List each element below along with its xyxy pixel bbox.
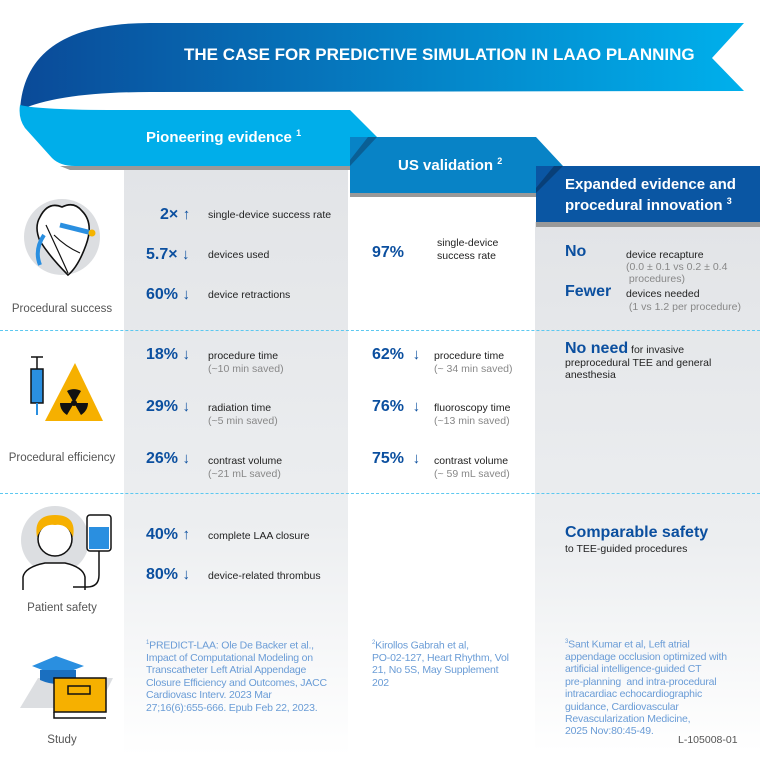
stat: 60%: 60% ↓ [146,286,190,303]
reference 1: Impact of Computational Modeling on [146,652,313,664]
icon: heart [24,199,100,276]
panel: us validation: single-device [437,237,498,249]
stat: 18%: 18% ↓ [146,346,190,363]
reference 3: 2025 Nov:80:45-49. [565,725,654,737]
panel: us validation: fluoroscopy time [434,402,510,414]
reference 3: Revascularization Medicine, [565,713,690,725]
dashed dividers [0,330,760,331]
panel: expanded evidence: (0.0 ± 0.1 vs 0.2 ± 0.4 [626,261,727,273]
reference 3: 3Sant Kumar et al, Left atrial [565,638,690,650]
panel: pioneering evidence [146,206,331,714]
stat: 40%: 40% ↑ [146,526,190,543]
reference 3: intracardiac echocardiographic [565,688,702,700]
stat: fewer devices: Fewer [565,283,611,300]
code: L-105008-01: L-105008-01 [678,734,738,746]
reference 1: 1PREDICT-LAA: Ole De Backer et al., [146,640,314,652]
label: procedural efficiency: Procedural efficiency [9,452,115,464]
panel: pioneering evidence: (~10 min saved) [208,363,284,375]
reference 2: PO-02-127, Heart Rhythm, Vol [372,652,509,664]
reference 3: guidance, Cardiovascular [565,701,679,713]
stat: 62%: 62% ↓ [372,346,420,363]
panel: expanded evidence: (1 vs 1.2 per procedure) [629,301,741,313]
panel: pioneering evidence: complete LAA closure [208,530,310,542]
reference 1: Closure Efficiency and Outcomes, JACC [146,677,327,689]
column background: expanded [535,222,760,752]
stat: comparable safety [565,524,708,555]
reference 3: pre-planning and intra-procedural [565,676,716,688]
us band [350,137,563,193]
heading: us validation: US validation 2 [398,156,502,174]
reference 3 [565,638,727,737]
dark title band [20,23,744,110]
panel: pioneering evidence: (~5 min saved) [208,415,278,427]
reference 1: 27;16(6):655-666. Epub Feb 22, 2023. [146,702,317,714]
heading: expanded evidence [565,176,736,214]
reference 1: Transcatheter Left Atrial Appendage [146,664,306,676]
icon: study [20,656,113,719]
stat: no need [565,340,711,381]
panel: us validation: contrast volume [434,455,508,467]
title: THE CASE FOR PREDICTIVE SIMULATION IN LAAO PLANNING [184,45,695,64]
pioneering band [20,105,377,166]
ribbon header [20,23,760,227]
label: study: Study [47,734,77,746]
stat: 76%: 76% ↓ [372,398,420,415]
label: procedural success: Procedural success [12,303,112,315]
stat: 26%: 26% ↓ [146,450,190,467]
panel: us validation: (~ 59 mL saved) [434,468,510,480]
expanded band [536,166,760,222]
panel: pioneering evidence: contrast volume [208,455,282,467]
panel: pioneering evidence: radiation time [208,402,271,414]
stat: 97%: 97% [372,244,404,261]
panel: us validation: procedure time [434,350,504,362]
panel: expanded evidence [565,243,741,737]
stat: no device recapture: No [565,243,586,260]
panel: pioneering evidence: single-device success rate [208,209,331,221]
reference 2: 202 [372,677,389,689]
column background: pioneering [124,166,348,756]
stat: comparable safety: to TEE-guided procedures [565,543,687,555]
stat: 75%: 75% ↓ [372,450,420,467]
icon: syringe and radiation [30,356,103,421]
panel: expanded evidence: devices needed [626,288,700,300]
reference 1: Cardiovasc Interv. 2023 Mar [146,689,272,701]
stat: 29%: 29% ↓ [146,398,190,415]
panel: us validation: (~13 min saved) [434,415,510,427]
reference 3: artificial intelligence-guided CT [565,663,701,675]
stat: 80%: 80% ↓ [146,566,190,583]
panel: expanded evidence: procedures) [629,273,685,285]
heading: expanded evidence: procedural innovation 3 [565,196,732,214]
panel: pioneering evidence: device retractions [208,289,290,301]
reference 1 [146,640,327,714]
stat: no need: No need for invasive [565,340,684,357]
shadows [60,166,350,170]
reference 2: 21, No 5S, May Supplement [372,664,498,676]
stat: comparable safety: Comparable safety [565,524,708,541]
label: patient safety: Patient safety [27,602,97,614]
heading: pioneering evidence: Pioneering evidence 1 [146,128,301,146]
stat: no need: anesthesia [565,369,616,381]
panel: us validation [372,237,512,689]
heading: expanded evidence: Expanded evidence and [565,176,736,193]
panel: expanded evidence: device recapture [626,249,704,261]
stat: 2x: 2× ↑ [160,206,190,223]
reference 3: appendage occlusion optimized with [565,651,727,663]
stat: no need: preprocedural TEE and general [565,356,711,368]
panel: pioneering evidence: (~21 mL saved) [208,468,281,480]
reference 2 [372,640,509,689]
panel: pioneering evidence: procedure time [208,350,278,362]
stat: 5.7x: 5.7× ↓ [146,246,190,263]
panel: pioneering evidence: devices used [208,249,269,261]
panel: pioneering evidence: device-related thrombus [208,570,321,582]
reference 2: 2Kirollos Gabrah et al, [372,640,469,652]
panel: us validation: success rate [437,250,496,262]
icon: patient [21,506,112,590]
panel: us validation: (~ 34 min saved) [434,363,512,375]
